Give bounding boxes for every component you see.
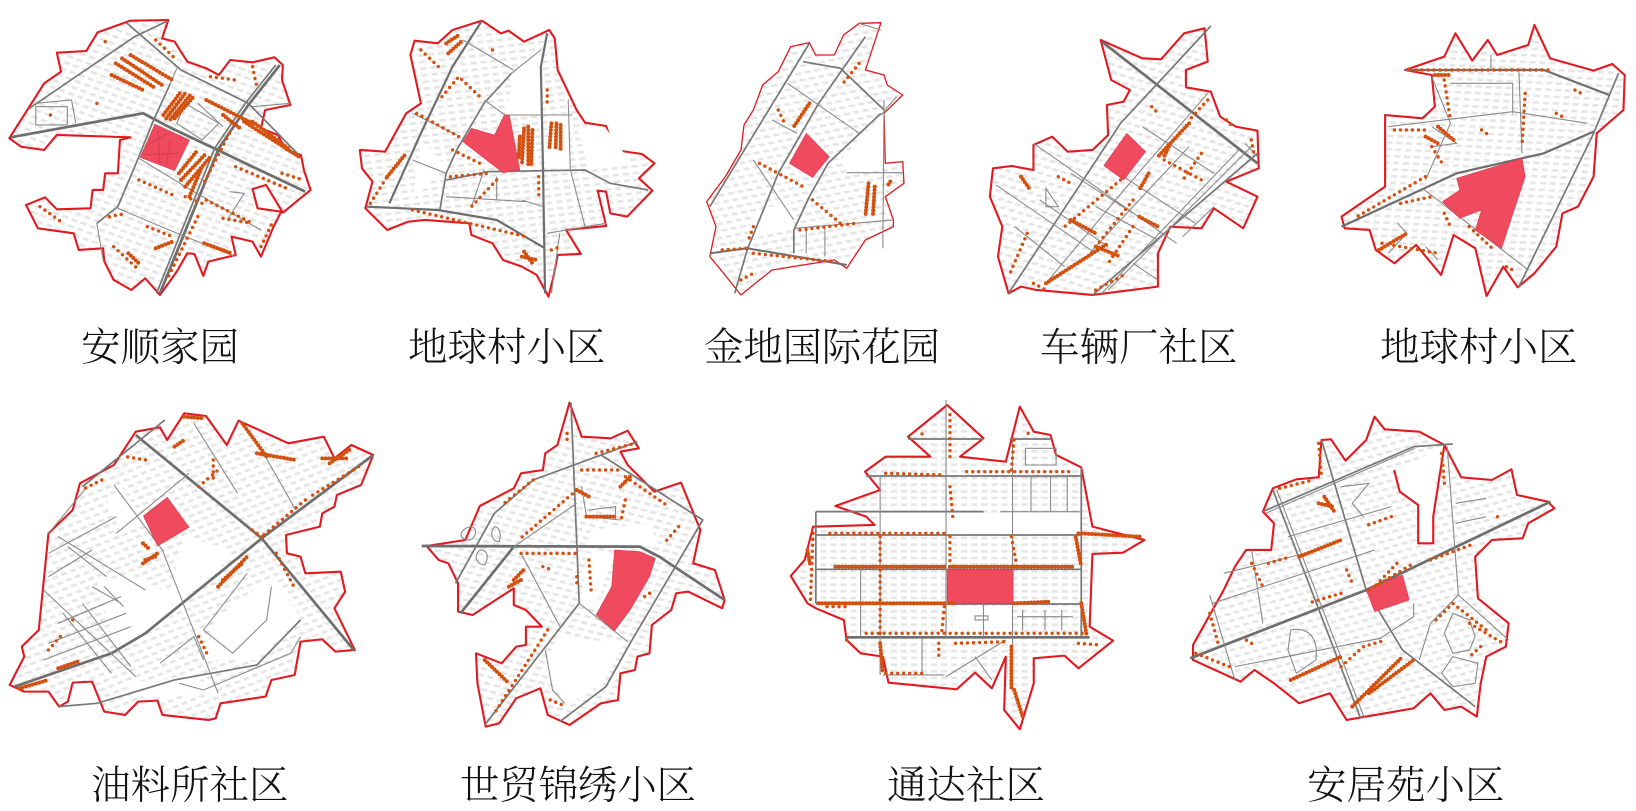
map panel: 车辆厂社区 <box>990 26 1259 370</box>
map: 安居苑小区 <box>1190 417 1554 720</box>
map: 通达社区 <box>791 400 1144 729</box>
label: 世贸锦绣小区: 世贸锦绣小区 <box>460 764 696 808</box>
map: 地球村小区 (2) <box>1342 25 1625 296</box>
label: 地球村小区 (2): 地球村小区 <box>1380 326 1578 370</box>
map: 金地国际花园 <box>707 23 904 295</box>
label: 通达社区: 通达社区 <box>887 764 1045 808</box>
map panel: 通达社区 <box>791 400 1144 808</box>
label: 安居苑小区: 安居苑小区 <box>1307 764 1504 808</box>
map panel: 世贸锦绣小区 <box>422 403 725 808</box>
map: 安顺家园 <box>9 20 311 295</box>
map panel: 油料所社区 <box>10 413 373 808</box>
map panel: 金地国际花园 <box>704 23 940 370</box>
map: 世贸锦绣小区 <box>422 403 725 727</box>
label: 车辆厂社区: 车辆厂社区 <box>1040 326 1238 370</box>
map panel: 地球村小区 <box>360 21 654 370</box>
label: 油料所社区: 油料所社区 <box>91 764 288 808</box>
map: 车辆厂社区 <box>990 26 1259 295</box>
map: 地球村小区 <box>360 21 654 297</box>
label: 安顺家园: 安顺家园 <box>81 326 239 370</box>
map: 油料所社区 <box>10 413 373 720</box>
map panel: 安顺家园 <box>9 20 311 370</box>
map panel: 地球村小区 (2) <box>1342 25 1625 370</box>
map panel: 安居苑小区 <box>1190 417 1554 808</box>
label: 地球村小区: 地球村小区 <box>408 326 606 370</box>
label: 金地国际花园: 金地国际花园 <box>704 326 940 370</box>
